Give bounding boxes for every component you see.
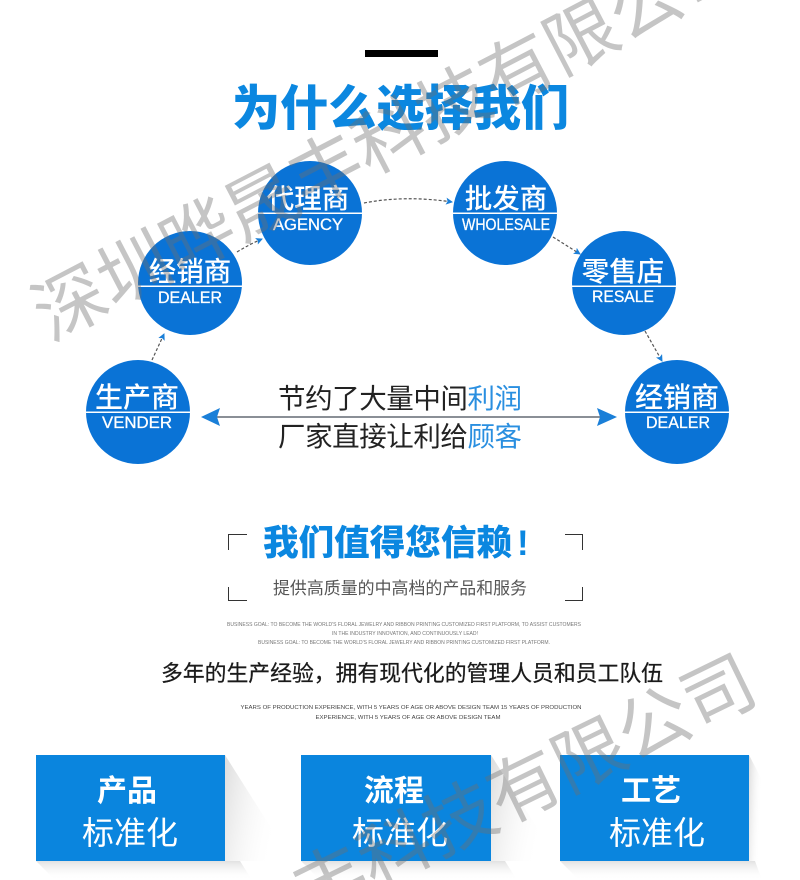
node: wholesale [453,161,557,265]
experience english text [240,705,582,721]
factory text: 厂家直接让利给顾客 [278,421,522,452]
node: dealer end: DEALER [646,414,710,432]
node: vender [86,360,190,464]
node: vender: VENDER [102,414,172,432]
trust subheading: 提供高质量的中高档的产品和服务 [273,579,527,598]
arrow: resale to dealer end [645,331,662,361]
trust heading: 我们值得您信赖 [263,524,512,563]
trust heading: ! [517,524,529,563]
node: dealer: 经销商 [149,256,231,287]
node: resale: 零售店 [582,256,664,287]
title: 为什么选择我们 [232,82,569,136]
savings text: 节约了大量中间利润 [278,383,522,414]
node: dealer end [625,360,729,464]
box shadows [36,755,762,880]
node: dealer: DEALER [158,289,222,307]
arrow: wholesale to resale [553,237,580,254]
business goal text: IN THE INDUSTRY INNOVATION, AND CONTINUOUSLY LEAD! [332,631,478,637]
node: resale: RESALE [592,288,654,306]
card: craft: 工艺 [621,775,681,808]
node: agency: AGENCY [273,216,343,234]
node: vender: 生产商 [95,382,179,413]
arrow: vender to dealer [152,334,164,360]
node: dealer [138,231,242,335]
node: agency: 代理商 [267,183,349,214]
business goal text [227,622,581,646]
card: process: 标准化 [352,815,448,851]
business goal text: BUSINESS GOAL: TO BECOME THE WORLD'S FLORAL JEWELRY AND RIBBON PRINTING CUSTOMIZED FIRST PLATFORM. [258,640,550,646]
experience heading: 多年的生产经验，拥有现代化的管理人员和员工队伍 [161,661,663,686]
card: process [301,755,491,861]
double arrow [201,408,617,426]
card: product: 产品 [97,775,157,808]
business goal text: BUSINESS GOAL: TO BECOME THE WORLD'S FLORAL JEWELRY AND RIBBON PRINTING CUSTOMIZED FIRST PLATFORM, TO ASSIST CUSTOMERS [227,622,581,628]
corner brackets [228,534,582,600]
arrow: dealer to agency [237,239,262,252]
node: dealer end: 经销商 [635,382,719,413]
arrow: agency to wholesale [364,199,452,203]
experience english text: EXPERIENCE, WITH 5 YEARS OF AGE OR ABOVE DESIGN TEAM [316,715,501,721]
node: wholesale: WHOLESALE [462,216,550,234]
card: process: 流程 [364,775,424,808]
card: product [36,755,225,861]
flow diagram [86,161,729,464]
node: wholesale: 批发商 [465,183,547,214]
card: craft: 标准化 [609,815,705,851]
top black bar [365,50,438,57]
experience english text: YEARS OF PRODUCTION EXPERIENCE, WITH 5 YEARS OF AGE OR ABOVE DESIGN TEAM 15 YEARS OF PRODUCTION [240,705,582,711]
node: resale [572,231,676,335]
node: agency [258,161,362,265]
card: craft [560,755,749,861]
card: product: 标准化 [82,815,178,851]
